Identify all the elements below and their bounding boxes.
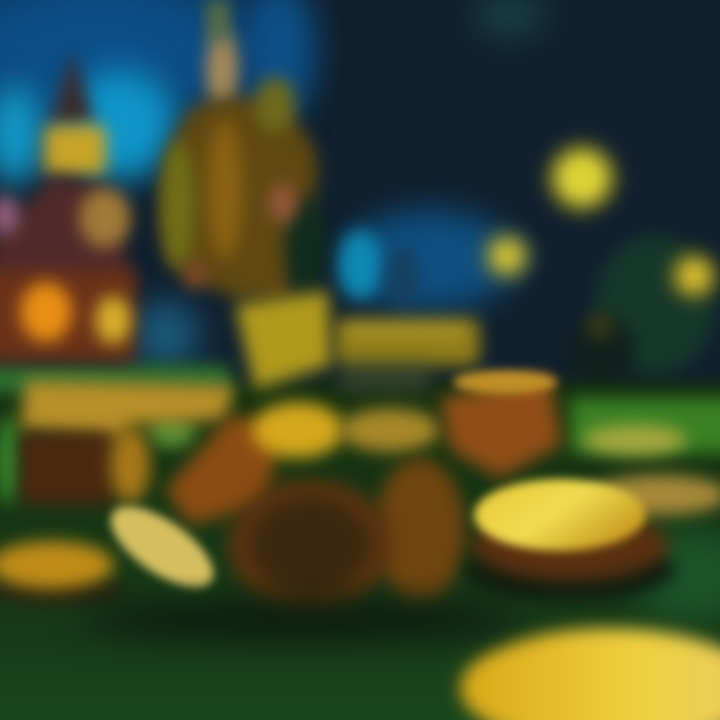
distant spire [386, 245, 418, 305]
background tree [565, 235, 715, 385]
gold lettering-like band [335, 318, 480, 392]
left lying coins [0, 491, 226, 604]
gold path [20, 380, 235, 440]
ground band [0, 365, 720, 720]
foreground coin [460, 628, 720, 720]
coin stacks [20, 370, 562, 525]
house [0, 50, 135, 362]
shadow under coins [80, 600, 520, 640]
right lying coins [465, 425, 720, 600]
large central coin [228, 458, 465, 611]
glowing orbs [479, 140, 720, 340]
leprechaun figure [161, 0, 332, 390]
